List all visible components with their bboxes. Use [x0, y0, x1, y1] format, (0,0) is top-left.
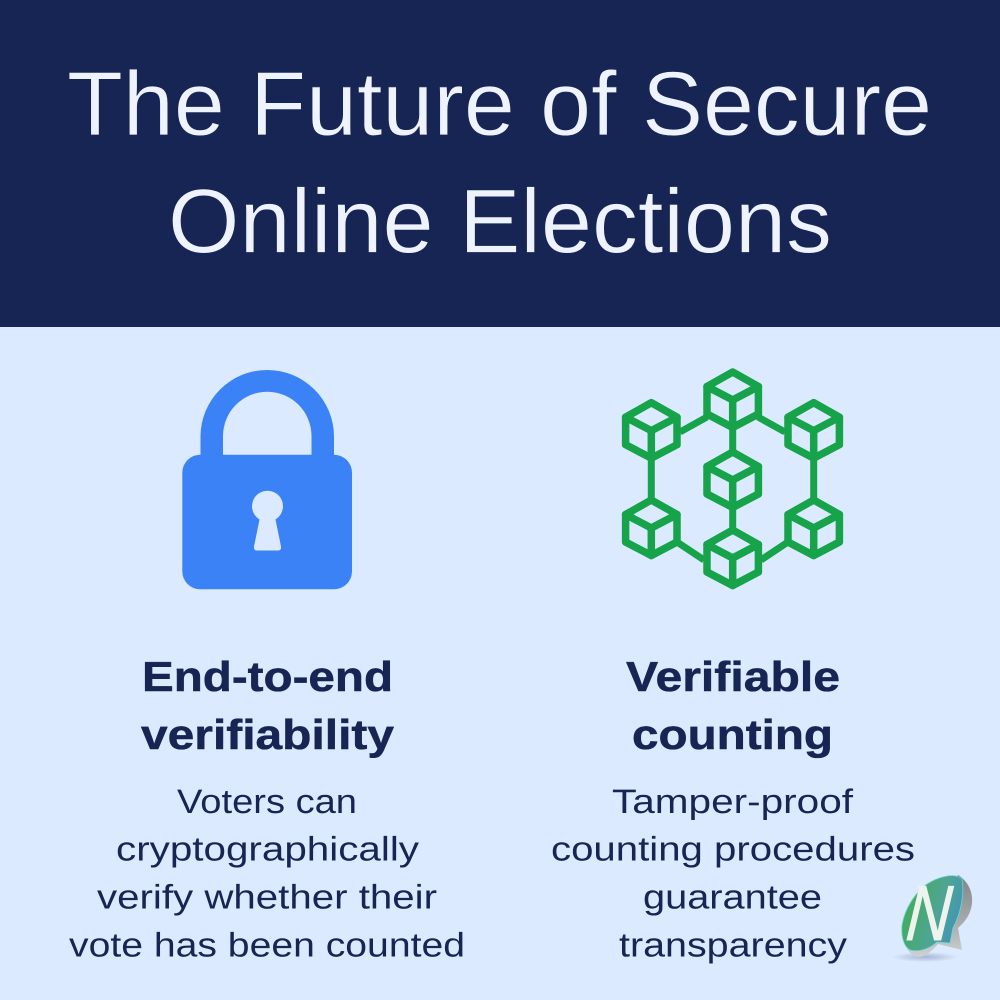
- right column body text: guarantee: [643, 878, 822, 916]
- left column body text: [69, 783, 465, 964]
- title: Online Elections: [168, 171, 832, 272]
- icon: blockchain network of cubes: [626, 372, 839, 586]
- right column body text: counting procedures: [551, 830, 915, 868]
- right column body text: Tamper-proof: [612, 783, 854, 821]
- left column heading: End-to-end: [142, 653, 393, 700]
- left column body text: verify whether their: [97, 878, 437, 916]
- right column heading: [626, 653, 840, 758]
- logo: N speech bubble: [892, 869, 972, 962]
- header banner: [0, 0, 1000, 327]
- left column body text: cryptographically: [116, 830, 419, 868]
- left column heading: verifiability: [141, 711, 395, 758]
- right column body text: [551, 783, 915, 964]
- left column heading: [141, 653, 395, 758]
- left column body text: vote has been counted: [69, 926, 465, 964]
- title: The Future of Secure: [67, 54, 932, 155]
- right column heading: counting: [632, 711, 833, 758]
- right column body text: transparency: [619, 926, 847, 964]
- left column body text: Voters can: [177, 783, 357, 821]
- connecting lines between cubes: [651, 417, 814, 560]
- right column heading: Verifiable: [626, 653, 840, 700]
- title: [67, 54, 932, 272]
- logo letter N: N: [904, 869, 956, 957]
- icon: padlock: [182, 370, 352, 589]
